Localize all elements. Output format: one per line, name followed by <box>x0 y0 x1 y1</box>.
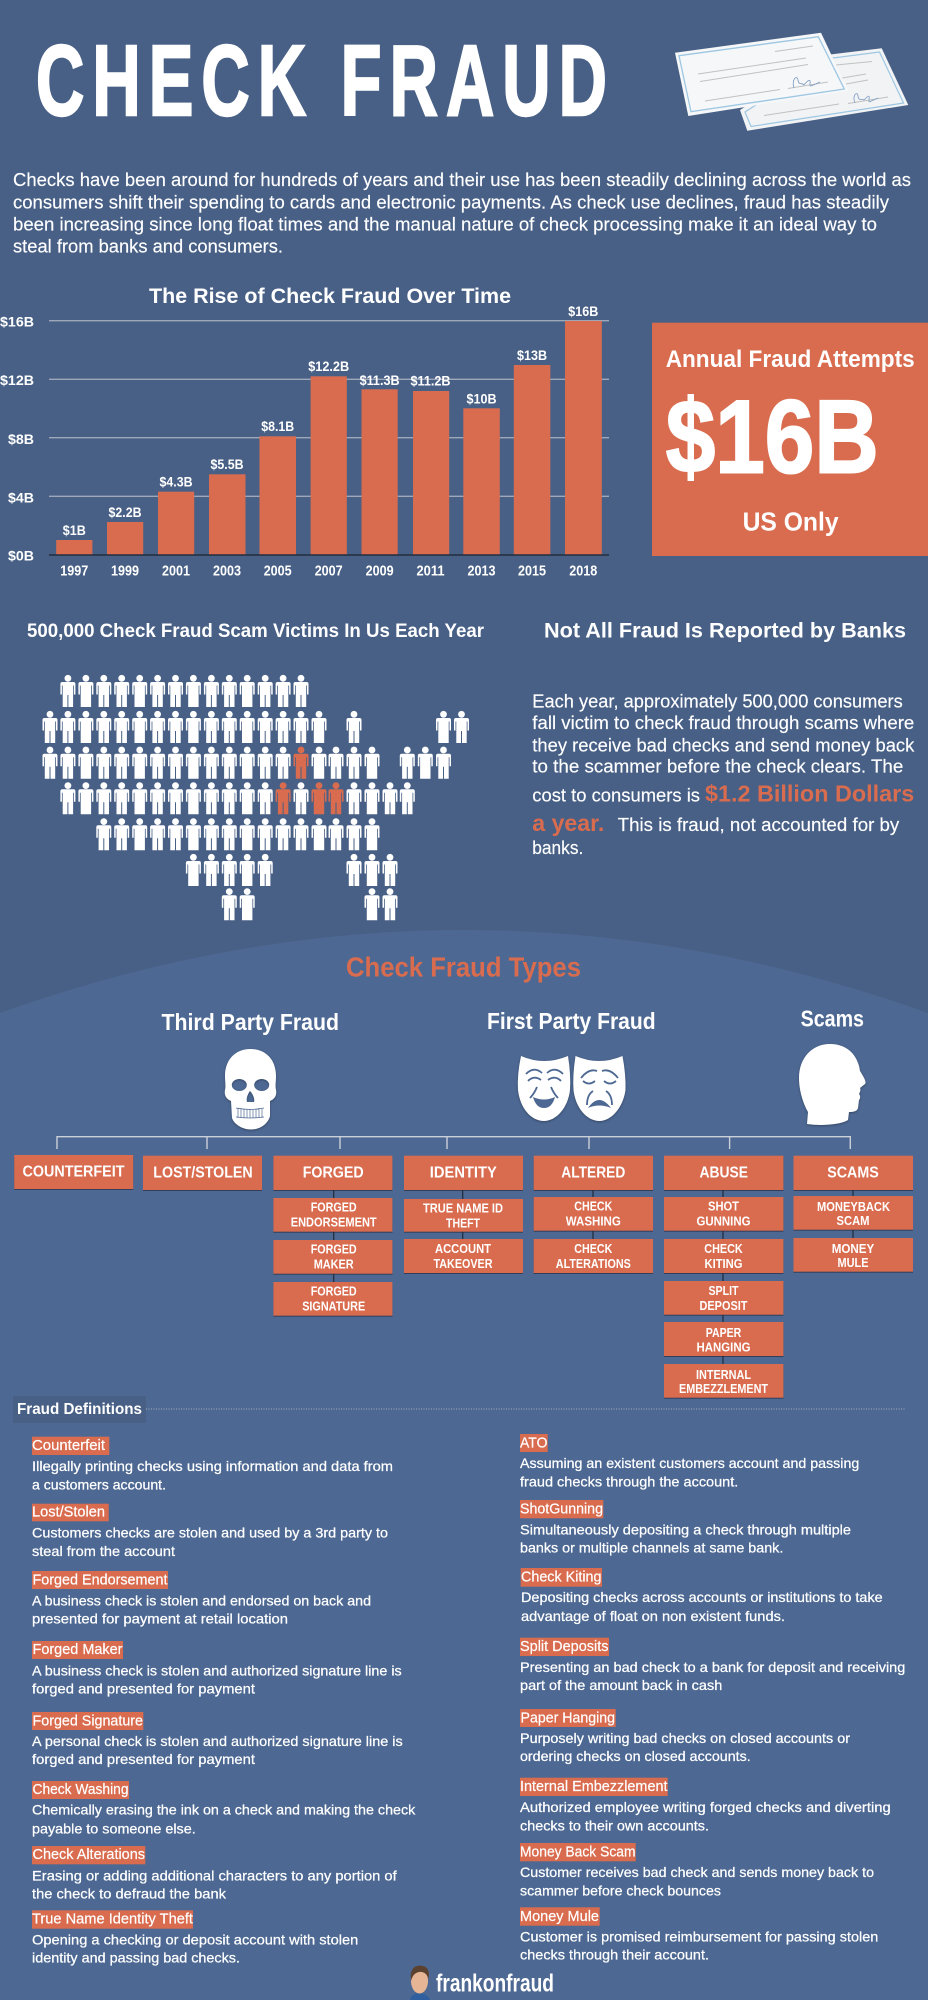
y axis labels: $8B <box>8 431 34 447</box>
value labels <box>63 303 598 538</box>
text block: scam cost: This is fraud, not accounted for by <box>618 815 899 835</box>
vertical connectors between boxes <box>334 1190 853 1365</box>
definition: check kiting: Depositing checks across accounts or institutions to take <box>521 1589 883 1605</box>
definition: internal embezzlement: Authorized employee writing forged checks and diverting <box>520 1799 891 1815</box>
column: identity <box>404 1156 523 1273</box>
definition: ATO: ATO <box>520 1435 548 1451</box>
value labels: $1B <box>63 522 86 538</box>
definition: forged maker <box>32 1641 402 1696</box>
column: altered <box>534 1156 653 1273</box>
intro text block: been increasing since long float times and the manual nature of check processing make it an ideal way to <box>13 214 877 234</box>
heading: check fraud types: Check Fraud Types <box>346 952 581 983</box>
y axis labels: $0B <box>8 548 34 564</box>
column: altered: CHECK <box>574 1241 613 1256</box>
definition: paper hanging: ordering checks on closed accounts. <box>520 1748 751 1764</box>
definition: paper hanging: Purposely writing bad checks on closed accounts or <box>520 1730 850 1746</box>
definition: check alterations: Check Alterations <box>32 1847 145 1863</box>
box: lost stolen <box>143 1156 262 1190</box>
definition: forged endorsement: A business check is stolen and endorsed on back and <box>32 1592 371 1608</box>
heading: scams: Scams <box>801 1006 864 1032</box>
panel: annual fraud attempts <box>652 323 928 556</box>
definition: internal embezzlement: Internal Embezzlement <box>520 1779 668 1795</box>
year labels: 2007 <box>315 564 343 580</box>
column: abuse: HANGING <box>696 1340 750 1354</box>
box: lost stolen: LOST/STOLEN <box>153 1164 253 1181</box>
definition: lost stolen: steal from the account <box>32 1543 175 1559</box>
icon: two checks <box>675 33 908 131</box>
value labels: $13B <box>517 347 547 363</box>
definition: ATO <box>520 1434 859 1489</box>
column: forged: SIGNATURE <box>302 1299 365 1314</box>
text block: scam cost: fall victim to check fraud through scams where <box>532 713 914 733</box>
year labels: 2005 <box>264 564 292 580</box>
definition: shotgunning: ShotGunning <box>520 1501 603 1517</box>
year labels: 2009 <box>366 564 394 580</box>
column: forged: FORGED <box>311 1284 357 1299</box>
fraud type boxes <box>14 1155 913 1398</box>
text block: scam cost: a year. <box>532 810 604 836</box>
panel: annual fraud attempts: US Only <box>743 507 839 537</box>
lighter curved background panel <box>0 930 928 2000</box>
heading: not all fraud reported: Not All Fraud Is Reported by Banks <box>544 619 906 642</box>
y axis labels: $4B <box>8 490 34 506</box>
year labels: 1997 <box>60 564 88 580</box>
icon: portrait <box>410 1966 430 2000</box>
value labels: $12.2B <box>308 358 349 374</box>
column: abuse: ABUSE <box>699 1164 748 1181</box>
definition: true name identity theft: identity and passing bad checks. <box>32 1950 240 1966</box>
column: abuse: INTERNAL <box>696 1367 751 1382</box>
definition: split deposits <box>520 1638 905 1693</box>
column: forged <box>273 1156 392 1316</box>
definition: check washing: payable to someone else. <box>32 1821 196 1837</box>
definition: money mule: Customer is promised reimbursement for passing stolen <box>520 1928 878 1944</box>
definition: forged maker: A business check is stolen and authorized signature line is <box>32 1662 402 1678</box>
definition: split deposits: Split Deposits <box>520 1639 608 1655</box>
heading: fraud definitions: Fraud Definitions <box>17 1401 142 1418</box>
definition: money back scam: scammer before check bounces <box>520 1882 721 1898</box>
box: counterfeit <box>14 1155 133 1189</box>
definition: money back scam: Money Back Scam <box>520 1845 636 1861</box>
column: altered: ALTERATIONS <box>556 1256 631 1271</box>
definition: internal embezzlement: checks to their own accounts. <box>520 1817 709 1833</box>
box: counterfeit: COUNTERFEIT <box>22 1164 125 1180</box>
definition: money back scam: Customer receives bad check and sends money back to <box>520 1864 874 1880</box>
column: forged: MAKER <box>314 1257 354 1272</box>
year labels: 2015 <box>518 564 546 580</box>
column: abuse: CHECK <box>704 1241 743 1256</box>
comedy mask <box>518 1056 570 1121</box>
definition: forged maker: Forged Maker <box>32 1642 123 1658</box>
intro text block: Checks have been around for hundreds of years and their use has been steadily declining across the world as <box>13 170 911 190</box>
definition: counterfeit: Illegally printing checks using information and data from <box>32 1458 393 1474</box>
column: identity: IDENTITY <box>430 1164 497 1181</box>
column: abuse: SHOT <box>708 1199 739 1214</box>
tragedy mask <box>573 1056 626 1121</box>
column: abuse: EMBEZZLEMENT <box>679 1381 768 1396</box>
definition: counterfeit <box>32 1437 393 1492</box>
value labels: $8.1B <box>261 418 294 434</box>
definition: forged endorsement <box>32 1571 371 1626</box>
logo: frankonfraud <box>410 1966 554 2000</box>
bars <box>56 321 602 555</box>
bar chart: rise of check fraud <box>0 303 609 580</box>
value labels: $5.5B <box>210 456 244 472</box>
definition: split deposits: Presenting an bad check to a bank for deposit and receiving <box>520 1659 905 1675</box>
title: CHECK FRAUD <box>36 25 615 137</box>
definition: split deposits: part of the amount back in cash <box>520 1677 722 1693</box>
column: abuse: KITING <box>704 1256 742 1271</box>
y axis labels: $12B <box>0 372 34 388</box>
year labels: 2003 <box>213 564 241 580</box>
column: forged: ENDORSEMENT <box>291 1215 377 1230</box>
definition: forged signature: A personal check is stolen and authorized signature line is <box>32 1733 403 1749</box>
column: forged: FORGED <box>311 1242 357 1257</box>
definition: ATO: Assuming an existent customers account and passing <box>520 1455 859 1471</box>
value labels: $11.3B <box>360 372 400 388</box>
definition: shotgunning: Simultaneously depositing a check through multiple <box>520 1521 851 1537</box>
heading: fraud definitions <box>13 1396 906 1423</box>
definition: forged signature: forged and presented for payment <box>32 1751 255 1767</box>
intro text block: consumers shift their spending to cards and electronic payments. As check use declines, fraud has steadily <box>13 192 889 212</box>
heading: third party fraud: Third Party Fraud <box>162 1009 339 1035</box>
heading: first party fraud: First Party Fraud <box>487 1008 656 1034</box>
column: scams: SCAM <box>836 1213 870 1228</box>
text block: scam cost: cost to consumers is <box>532 786 700 806</box>
definition: counterfeit: Counterfeit <box>32 1438 105 1454</box>
definition: paper hanging <box>520 1709 850 1764</box>
value labels: $16B <box>568 303 598 319</box>
column: abuse: PAPER <box>706 1325 742 1340</box>
y axis labels: $16B <box>0 314 34 330</box>
year labels <box>60 564 597 580</box>
definition: check alterations: the check to defraud the bank <box>32 1885 227 1901</box>
year labels: 1999 <box>111 564 139 580</box>
definition: shotgunning <box>520 1500 851 1556</box>
definition: true name identity theft: True Name Identity Theft <box>32 1911 193 1927</box>
intro text block <box>13 170 911 257</box>
definition: forged signature <box>32 1712 403 1767</box>
definition: lost stolen <box>32 1504 388 1559</box>
pictogram: US map of people <box>42 675 469 920</box>
text block: scam cost <box>532 691 915 858</box>
icon: skull <box>225 1049 276 1130</box>
column: altered: WASHING <box>566 1214 621 1229</box>
column: identity: TAKEOVER <box>434 1256 493 1271</box>
text block: scam cost: to the scammer before the check clears. The <box>532 757 903 777</box>
panel: annual fraud attempts: $16B <box>666 380 879 496</box>
definition: forged endorsement: presented for payment at retail location <box>32 1610 288 1626</box>
column: scams <box>794 1156 913 1272</box>
year labels: 2011 <box>416 564 444 580</box>
column: altered: CHECK <box>574 1199 613 1214</box>
connector tree <box>57 1137 850 1149</box>
definition: paper hanging: Paper Hanging <box>520 1710 615 1726</box>
column: scams: MULE <box>838 1255 869 1270</box>
icon: comedy and tragedy masks <box>518 1056 626 1121</box>
definition: lost stolen: Customers checks are stolen and used by a 3rd party to <box>32 1525 388 1541</box>
definition: money back scam <box>520 1843 874 1898</box>
column: abuse: DEPOSIT <box>700 1298 748 1313</box>
column: identity: ACCOUNT <box>435 1241 491 1256</box>
column: forged: FORGED <box>311 1200 357 1215</box>
definition: true name identity theft: Opening a checking or deposit account with stolen <box>32 1932 358 1948</box>
panel: annual fraud attempts: Annual Fraud Attempts <box>666 346 915 373</box>
column: scams: MONEYBACK <box>817 1199 891 1214</box>
value labels: $4.3B <box>160 474 192 490</box>
value labels: $10B <box>466 391 496 407</box>
column: identity: TRUE NAME ID <box>423 1200 503 1216</box>
definition: check alterations: Erasing or adding additional characters to any portion of <box>32 1867 397 1883</box>
definition: true name identity theft <box>32 1910 358 1966</box>
heading: victims: 500,000 Check Fraud Scam Victims In Us Each Year <box>27 620 484 642</box>
text block: scam cost: Each year, approximately 500,000 consumers <box>532 691 903 711</box>
definition: forged endorsement: Forged Endorsement <box>32 1573 168 1589</box>
definition: check kiting: advantage of float on non existent funds. <box>521 1608 785 1624</box>
year labels: 2013 <box>468 564 496 580</box>
year labels: 2001 <box>162 564 190 580</box>
definition: money mule: Money Mule <box>520 1909 599 1925</box>
definition: counterfeit: a customers account. <box>32 1476 166 1492</box>
definition: check alterations <box>32 1846 397 1901</box>
highlight: cost amount: $1.2 Billion Dollars <box>705 781 914 807</box>
chart heading: The Rise of Check Fraud Over Time <box>149 285 511 308</box>
column: scams: SCAMS <box>827 1164 879 1181</box>
year labels: 2018 <box>569 564 597 580</box>
column: altered: ALTERED <box>561 1164 625 1181</box>
definition: check washing: Chemically erasing the ink on a check and making the check <box>32 1802 416 1818</box>
definition: lost stolen: Lost/Stolen <box>32 1504 105 1520</box>
definition: money mule: checks through their account. <box>520 1946 709 1962</box>
intro text block: steal from banks and consumers. <box>13 237 283 257</box>
definition: forged signature: Forged Signature <box>32 1714 143 1730</box>
logo: frankonfraud: frankonfraud <box>436 1970 554 1998</box>
column: abuse: SPLIT <box>708 1283 739 1298</box>
definition: shotgunning: banks or multiple channels at same bank. <box>520 1540 783 1556</box>
text block: scam cost: banks. <box>532 838 583 858</box>
definition: money mule <box>520 1907 878 1962</box>
definition: forged maker: forged and presented for payment <box>32 1680 255 1696</box>
text block: scam cost: they receive bad checks and send money back <box>532 735 915 755</box>
definition: check washing <box>32 1781 416 1837</box>
definition: ATO: fraud checks through the account. <box>520 1473 738 1489</box>
definition: internal embezzlement <box>520 1778 891 1833</box>
y axis labels <box>0 314 34 564</box>
value labels: $2.2B <box>108 504 142 520</box>
definition: check kiting <box>521 1568 883 1624</box>
definition: check kiting: Check Kiting <box>521 1570 602 1586</box>
column: scams: MONEY <box>832 1241 875 1256</box>
icon: head silhouette <box>799 1044 866 1125</box>
column: forged: FORGED <box>303 1164 364 1181</box>
value labels: $11.2B <box>410 372 450 388</box>
column: identity: THEFT <box>446 1216 480 1230</box>
definition: check washing: Check Washing <box>32 1782 128 1798</box>
column: abuse <box>664 1156 783 1398</box>
column: abuse: GUNNING <box>696 1214 750 1229</box>
